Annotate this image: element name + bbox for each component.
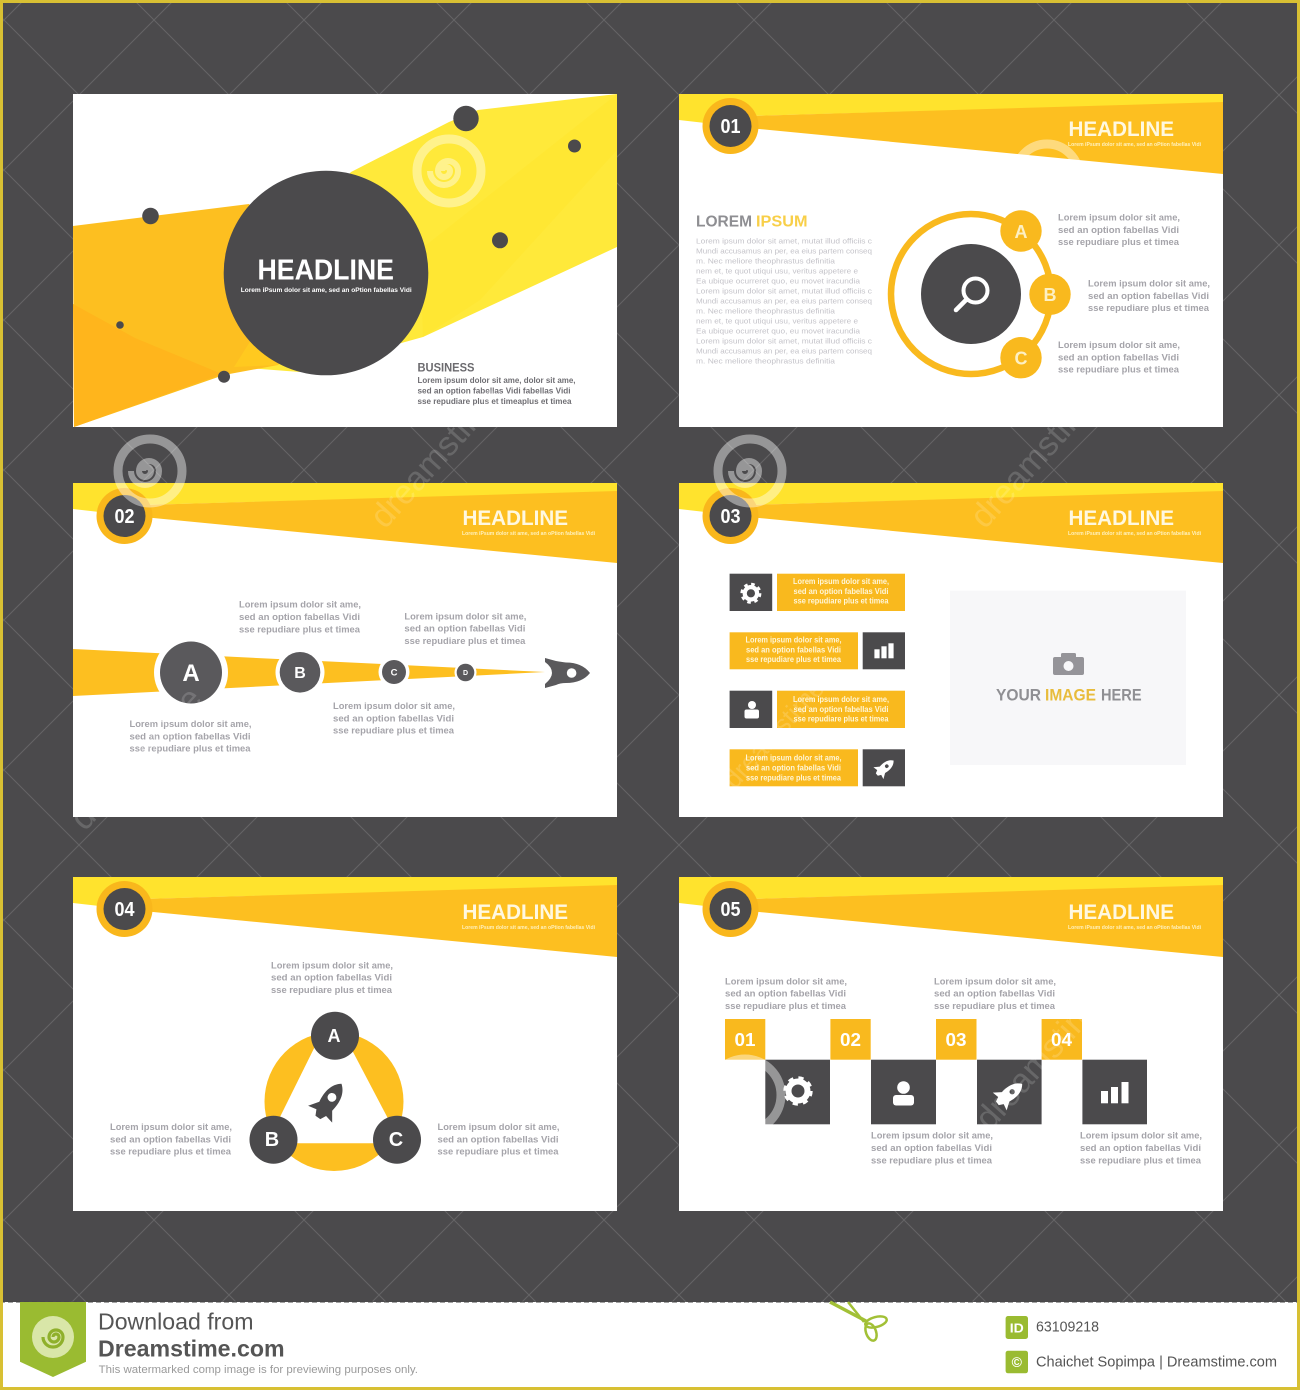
icon: rocket small bbox=[872, 755, 899, 780]
text 2: Lorem ipsum dolor sit ame, bbox=[934, 976, 1056, 987]
header banner 02: HEADLINE bbox=[462, 506, 568, 530]
body paragraph: Lorem ipsum dolor sit amet, mutat illud officiis c bbox=[696, 336, 872, 345]
row 4 rocket: sse repudiare plus et timea bbox=[746, 772, 841, 782]
body paragraph: Mundi accusamus an per, ea eius partem conseq bbox=[696, 296, 872, 305]
text A: sed an option fabellas Vidi bbox=[1058, 225, 1179, 236]
text B bbox=[1088, 279, 1210, 314]
text right bbox=[438, 1122, 560, 1158]
triangle cycle diagram: C bbox=[389, 1129, 403, 1151]
text top right: sse repudiare plus et timea bbox=[404, 636, 526, 647]
text bottom middle: Lorem ipsum dolor sit ame, bbox=[333, 701, 455, 712]
text 3 bbox=[871, 1131, 993, 1166]
cover business text bbox=[418, 363, 576, 406]
body paragraph: Lorem ipsum dolor sit amet, mutat illud officiis c bbox=[696, 236, 872, 245]
text bottom left: sse repudiare plus et timea bbox=[130, 744, 251, 755]
header banner 04: HEADLINE bbox=[462, 900, 568, 924]
watermark overlay: dreamstime bbox=[717, 673, 830, 794]
header banner 02: Lorem iPsum dolor sit ame, sed an oPtion fabellas Vidi bbox=[462, 531, 596, 537]
text top bbox=[271, 960, 393, 996]
text bottom middle: sed an option fabellas Vidi bbox=[333, 713, 454, 724]
icon: bar chart bbox=[874, 643, 894, 658]
lorem ipsum heading: IPSUM bbox=[756, 214, 808, 231]
download text bbox=[98, 1308, 418, 1376]
row 2 bars: Lorem ipsum dolor sit ame, bbox=[746, 634, 842, 644]
image placeholder bbox=[950, 591, 1186, 765]
triangle cycle diagram: A bbox=[328, 1026, 340, 1046]
row 1 gear: sse repudiare plus et timea bbox=[794, 596, 889, 606]
watermark overlay bbox=[63, 139, 1115, 1137]
step 02: 02 bbox=[840, 1030, 861, 1050]
row 2 bars: sse repudiare plus et timea bbox=[746, 654, 841, 664]
text top right: Lorem ipsum dolor sit ame, bbox=[404, 611, 527, 622]
tapered timeline: A bbox=[182, 660, 200, 687]
text C: sse repudiare plus et timea bbox=[1058, 365, 1180, 376]
icon: magnifier bbox=[921, 244, 1021, 344]
text bottom left: Lorem ipsum dolor sit ame, bbox=[130, 719, 252, 730]
text B: sed an option fabellas Vidi bbox=[1088, 291, 1209, 302]
step 01: 01 bbox=[734, 1030, 756, 1050]
header banner 03 bbox=[679, 483, 1223, 563]
cover business text: sse repudiare plus et timeaplus et timea bbox=[418, 396, 572, 406]
row 3 person: sed an option fabellas Vidi bbox=[794, 704, 888, 714]
text 4: Lorem ipsum dolor sit ame, bbox=[1080, 1131, 1202, 1142]
text C: Lorem ipsum dolor sit ame, bbox=[1058, 340, 1180, 351]
header banner 03: HEADLINE bbox=[1068, 506, 1174, 530]
icon: scissors bbox=[830, 1302, 888, 1342]
image placeholder: HERE bbox=[1101, 686, 1142, 705]
icon: person bbox=[744, 701, 759, 718]
cover title circle: HEADLINE bbox=[258, 254, 394, 286]
triangle cycle diagram: B bbox=[265, 1129, 279, 1151]
orbit diagram bbox=[891, 210, 1071, 378]
image id bbox=[1006, 1316, 1099, 1339]
body paragraph: Ea ubique ocurreret quo, eu movet iracundia bbox=[696, 276, 861, 285]
image placeholder: YOUR bbox=[996, 686, 1041, 705]
text 2 bbox=[934, 976, 1056, 1012]
watermark overlay: dreamstime bbox=[63, 680, 210, 837]
text B: sse repudiare plus et timea bbox=[1088, 303, 1210, 314]
header banner 01: Lorem iPsum dolor sit ame, sed an oPtion fabellas Vidi bbox=[1068, 142, 1202, 148]
row 1 gear: sed an option fabellas Vidi bbox=[794, 586, 888, 596]
row 3 person bbox=[730, 691, 905, 728]
text top right bbox=[404, 611, 527, 647]
icon: rocket large bbox=[306, 1075, 354, 1126]
step 04 bbox=[1042, 1019, 1147, 1124]
header banner 04 bbox=[73, 877, 617, 957]
row 4 rocket bbox=[730, 749, 905, 786]
cover business text: BUSINESS bbox=[418, 363, 475, 375]
cover amber band bbox=[73, 204, 330, 427]
text bottom left: sed an option fabellas Vidi bbox=[130, 731, 250, 742]
tapered timeline: C bbox=[391, 668, 398, 678]
copyright: © bbox=[1012, 1354, 1023, 1370]
orbit diagram: B bbox=[1044, 285, 1056, 305]
text top left bbox=[239, 600, 361, 635]
text 4 bbox=[1080, 1131, 1202, 1166]
step 03: 03 bbox=[946, 1030, 966, 1050]
header banner 04: Lorem iPsum dolor sit ame, sed an oPtion fabellas Vidi bbox=[462, 925, 596, 931]
text 3: Lorem ipsum dolor sit ame, bbox=[871, 1131, 993, 1142]
image placeholder: IMAGE bbox=[1045, 686, 1096, 705]
icon: green badge bbox=[20, 1302, 86, 1377]
body paragraph: Mundi accusamus an per, ea eius partem conseq bbox=[696, 346, 872, 355]
body paragraph: m. Nec meliore theophrastus definitia bbox=[696, 256, 836, 265]
lorem ipsum heading bbox=[696, 214, 808, 231]
icon: bar chart bbox=[1101, 1082, 1128, 1103]
body paragraph: Lorem ipsum dolor sit amet, mutat illud officiis c bbox=[696, 286, 872, 295]
header banner 02: 02 bbox=[114, 506, 134, 528]
cover title circle: Lorem iPsum dolor sit ame, sed an oPtion fabellas Vidi bbox=[241, 287, 412, 294]
text A: Lorem ipsum dolor sit ame, bbox=[1058, 213, 1180, 224]
body paragraph bbox=[696, 236, 872, 365]
panel: cover slide bbox=[73, 94, 617, 427]
row 2 bars: sed an option fabellas Vidi bbox=[746, 644, 841, 654]
download text: Dreamstime.com bbox=[98, 1336, 285, 1362]
image id: 63109218 bbox=[1036, 1320, 1099, 1336]
header banner 04: 04 bbox=[114, 899, 135, 921]
header banner 05: 05 bbox=[720, 899, 740, 921]
cover business text: sed an option fabellas Vidi fabellas Vidi bbox=[418, 385, 570, 395]
text left bbox=[110, 1122, 232, 1158]
step 03 bbox=[936, 1019, 1042, 1124]
icon: person bbox=[893, 1081, 914, 1106]
text right: sed an option fabellas Vidi bbox=[438, 1134, 558, 1145]
step 02 bbox=[830, 1019, 936, 1124]
header banner 01: HEADLINE bbox=[1068, 117, 1174, 141]
header banner 05: Lorem iPsum dolor sit ame, sed an oPtion fabellas Vidi bbox=[1068, 925, 1202, 931]
text 1: sse repudiare plus et timea bbox=[725, 1001, 847, 1012]
triangle cycle diagram bbox=[250, 1012, 421, 1171]
row 3 person: sse repudiare plus et timea bbox=[794, 714, 889, 724]
tapered timeline: B bbox=[294, 665, 306, 682]
panel: footer strip bbox=[0, 1302, 1300, 1390]
icon: rocket bbox=[545, 658, 590, 688]
download text: This watermarked comp image is for previewing purposes only. bbox=[99, 1364, 418, 1376]
copyright bbox=[1006, 1351, 1277, 1373]
text top right: sed an option fabellas Vidi bbox=[404, 624, 525, 635]
row 3 person: Lorem ipsum dolor sit ame, bbox=[793, 694, 889, 704]
icon: camera bbox=[1053, 653, 1084, 675]
body paragraph: m. Nec meliore theophrastus definitia bbox=[696, 306, 836, 315]
body paragraph: Ea ubique ocurreret quo, eu movet iracundia bbox=[696, 326, 861, 335]
text bottom left bbox=[130, 719, 252, 755]
text 4: sse repudiare plus et timea bbox=[1080, 1155, 1202, 1166]
step 04: 04 bbox=[1051, 1030, 1072, 1050]
orbit diagram: A bbox=[1014, 222, 1028, 242]
text bottom middle: sse repudiare plus et timea bbox=[333, 726, 455, 737]
text top left: sed an option fabellas Vidi bbox=[239, 612, 360, 623]
image id: ID bbox=[1010, 1320, 1024, 1336]
row 1 gear: Lorem ipsum dolor sit ame, bbox=[793, 576, 889, 586]
body paragraph: m. Nec meliore theophrastus definitia bbox=[696, 356, 836, 365]
copyright: Chaichet Sopimpa | Dreamstime.com bbox=[1036, 1355, 1277, 1371]
text 1: sed an option fabellas Vidi bbox=[725, 989, 846, 1000]
text 3: sse repudiare plus et timea bbox=[871, 1155, 993, 1166]
text top left: sse repudiare plus et timea bbox=[239, 624, 361, 635]
text top: Lorem ipsum dolor sit ame, bbox=[271, 960, 393, 971]
header banner 01: 01 bbox=[720, 116, 740, 138]
download text: Download from bbox=[98, 1308, 254, 1334]
text A bbox=[1058, 213, 1180, 248]
text left: sse repudiare plus et timea bbox=[110, 1147, 232, 1158]
panel: slide 03 bbox=[679, 483, 1223, 817]
cover dark amber facet bbox=[73, 304, 222, 427]
row 4 rocket: sed an option fabellas Vidi bbox=[746, 763, 841, 773]
tapered timeline: D bbox=[463, 670, 468, 677]
text 3: sed an option fabellas Vidi bbox=[871, 1143, 992, 1154]
header banner 05: HEADLINE bbox=[1068, 900, 1174, 924]
text right: Lorem ipsum dolor sit ame, bbox=[438, 1122, 560, 1133]
body paragraph: nem et, te quot utiqui usu, veritus appetere e bbox=[696, 316, 858, 325]
tapered timeline bbox=[73, 636, 545, 710]
icon: rocket bbox=[990, 1075, 1029, 1112]
panel: slide 01 bbox=[679, 94, 1223, 427]
header banner 05 bbox=[679, 877, 1223, 957]
text 1 bbox=[725, 976, 847, 1012]
orbit diagram: C bbox=[1014, 348, 1028, 368]
step 01 bbox=[725, 1019, 830, 1124]
cover business text: Lorem ipsum dolor sit ame, dolor sit ame, bbox=[418, 375, 576, 385]
panel: slide 02 bbox=[73, 483, 617, 817]
cover decorative dots bbox=[116, 106, 581, 383]
header banner 02 bbox=[73, 483, 617, 563]
text top: sed an option fabellas Vidi bbox=[271, 973, 392, 984]
icon: gear bbox=[785, 1078, 811, 1104]
text 1: Lorem ipsum dolor sit ame, bbox=[725, 976, 847, 987]
text bottom middle bbox=[333, 701, 455, 737]
text 4: sed an option fabellas Vidi bbox=[1080, 1143, 1201, 1154]
panel: slide 05 bbox=[679, 877, 1223, 1211]
icon: gear bbox=[742, 584, 760, 602]
watermark overlay: dreamstime bbox=[968, 980, 1115, 1137]
header banner 01 bbox=[679, 94, 1223, 174]
header banner 03: Lorem iPsum dolor sit ame, sed an oPtion fabellas Vidi bbox=[1068, 531, 1202, 537]
text top left: Lorem ipsum dolor sit ame, bbox=[239, 600, 361, 611]
text C: sed an option fabellas Vidi bbox=[1058, 352, 1179, 363]
text 2: sed an option fabellas Vidi bbox=[934, 989, 1055, 1000]
header banner 03: 03 bbox=[720, 506, 740, 528]
row 1 gear bbox=[730, 574, 905, 611]
text A: sse repudiare plus et timea bbox=[1058, 237, 1180, 248]
row 4 rocket: Lorem ipsum dolor sit ame, bbox=[746, 753, 842, 763]
panel: slide 04 bbox=[73, 877, 617, 1211]
text left: Lorem ipsum dolor sit ame, bbox=[110, 1122, 232, 1133]
text top: sse repudiare plus et timea bbox=[271, 985, 393, 996]
watermark overlay: dreamstime bbox=[963, 378, 1110, 535]
text left: sed an option fabellas Vidi bbox=[110, 1134, 231, 1145]
row 2 bars bbox=[730, 632, 905, 669]
cover yellow band bbox=[234, 94, 617, 372]
cover title circle bbox=[224, 171, 428, 375]
watermark overlay: dreamstime bbox=[363, 378, 510, 535]
body paragraph: nem et, te quot utiqui usu, veritus appetere e bbox=[696, 266, 858, 275]
lorem ipsum heading: LOREM bbox=[696, 214, 752, 231]
body paragraph: Mundi accusamus an per, ea eius partem conseq bbox=[696, 246, 872, 255]
text 2: sse repudiare plus et timea bbox=[934, 1001, 1056, 1012]
text C bbox=[1058, 340, 1180, 376]
text right: sse repudiare plus et timea bbox=[438, 1147, 559, 1158]
text B: Lorem ipsum dolor sit ame, bbox=[1088, 279, 1210, 290]
